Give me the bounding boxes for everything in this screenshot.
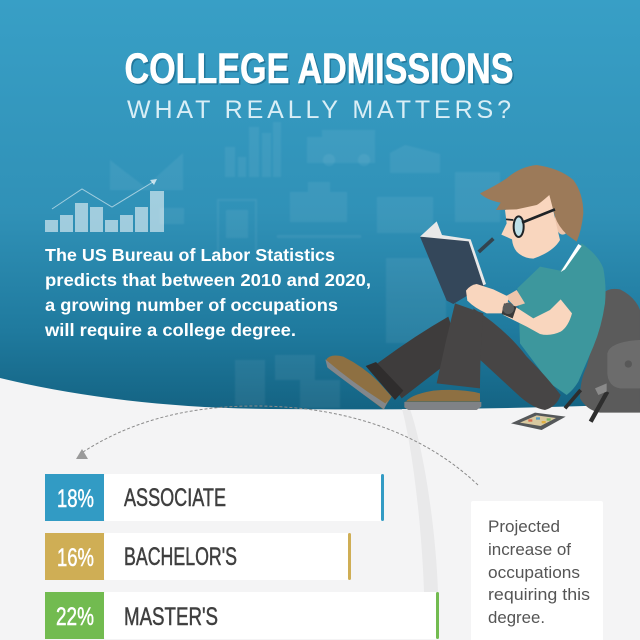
note text: occupations: [488, 563, 580, 582]
intro text: The US Bureau of Labor Statistics: [45, 245, 335, 265]
book: [420, 221, 486, 304]
note text: degree.: [488, 608, 545, 627]
upper arm shadow: [505, 290, 525, 307]
white floor: [0, 378, 640, 640]
thigh: [473, 308, 561, 410]
intro text: will require a college degree.: [44, 320, 296, 340]
arm: [503, 299, 572, 335]
bar chart icon: [45, 179, 164, 232]
associate percent: 18%: [57, 485, 94, 513]
shirt: [517, 243, 606, 395]
left sole: [325, 359, 388, 409]
row: bachelor's: [45, 533, 351, 580]
bachelor's label: BACHELOR'S: [124, 543, 237, 571]
row: associate: [45, 474, 384, 521]
master's percent tab: [45, 592, 104, 639]
glasses: [506, 209, 555, 237]
hair: [480, 165, 583, 242]
dashed arc arrow: [76, 406, 478, 485]
right sole: [404, 402, 481, 410]
note text: [488, 517, 590, 627]
title main line: COLLEGE ADMISSIONS: [124, 45, 514, 93]
pen: [479, 239, 493, 252]
right shoe: [405, 390, 480, 403]
hand: [466, 284, 508, 313]
row: master's: [45, 592, 439, 639]
header background: [0, 0, 640, 425]
note text: Projected: [488, 517, 560, 536]
master's percent: 22%: [56, 603, 94, 631]
intro text: predicts that between 2010 and 2020,: [45, 270, 371, 290]
associate percent tab: [45, 474, 104, 521]
student illustration: [325, 165, 640, 430]
left shoe: [326, 356, 392, 409]
left cuff: [366, 362, 403, 400]
associate label: ASSOCIATE: [124, 484, 226, 512]
far leg: [377, 317, 460, 398]
subtitle: WHAT REALLY MATTERS?: [127, 96, 511, 124]
bachelor's percent: 16%: [57, 544, 94, 572]
near shin: [437, 303, 483, 388]
tablet: [511, 413, 566, 430]
associate end marker: [381, 474, 384, 521]
intro text: [44, 245, 371, 340]
note text: requiring this: [488, 585, 590, 604]
master's end marker: [436, 592, 439, 639]
title shadow: COLLEGE ADMISSIONS: [126, 46, 515, 94]
floor fold stripe: [402, 409, 438, 592]
ear: [555, 204, 571, 235]
intro text: a growing number of occupations: [45, 295, 338, 315]
backpack: [565, 289, 640, 422]
master's label: MASTER'S: [124, 603, 218, 631]
watch: [502, 303, 517, 318]
face: [501, 193, 560, 259]
bachelor's end marker: [348, 533, 351, 580]
bachelor's percent tab: [45, 533, 104, 580]
shirt collar: [561, 244, 582, 272]
note text: increase of: [488, 540, 571, 559]
note card: [471, 501, 603, 640]
faint background icons: [110, 122, 500, 408]
